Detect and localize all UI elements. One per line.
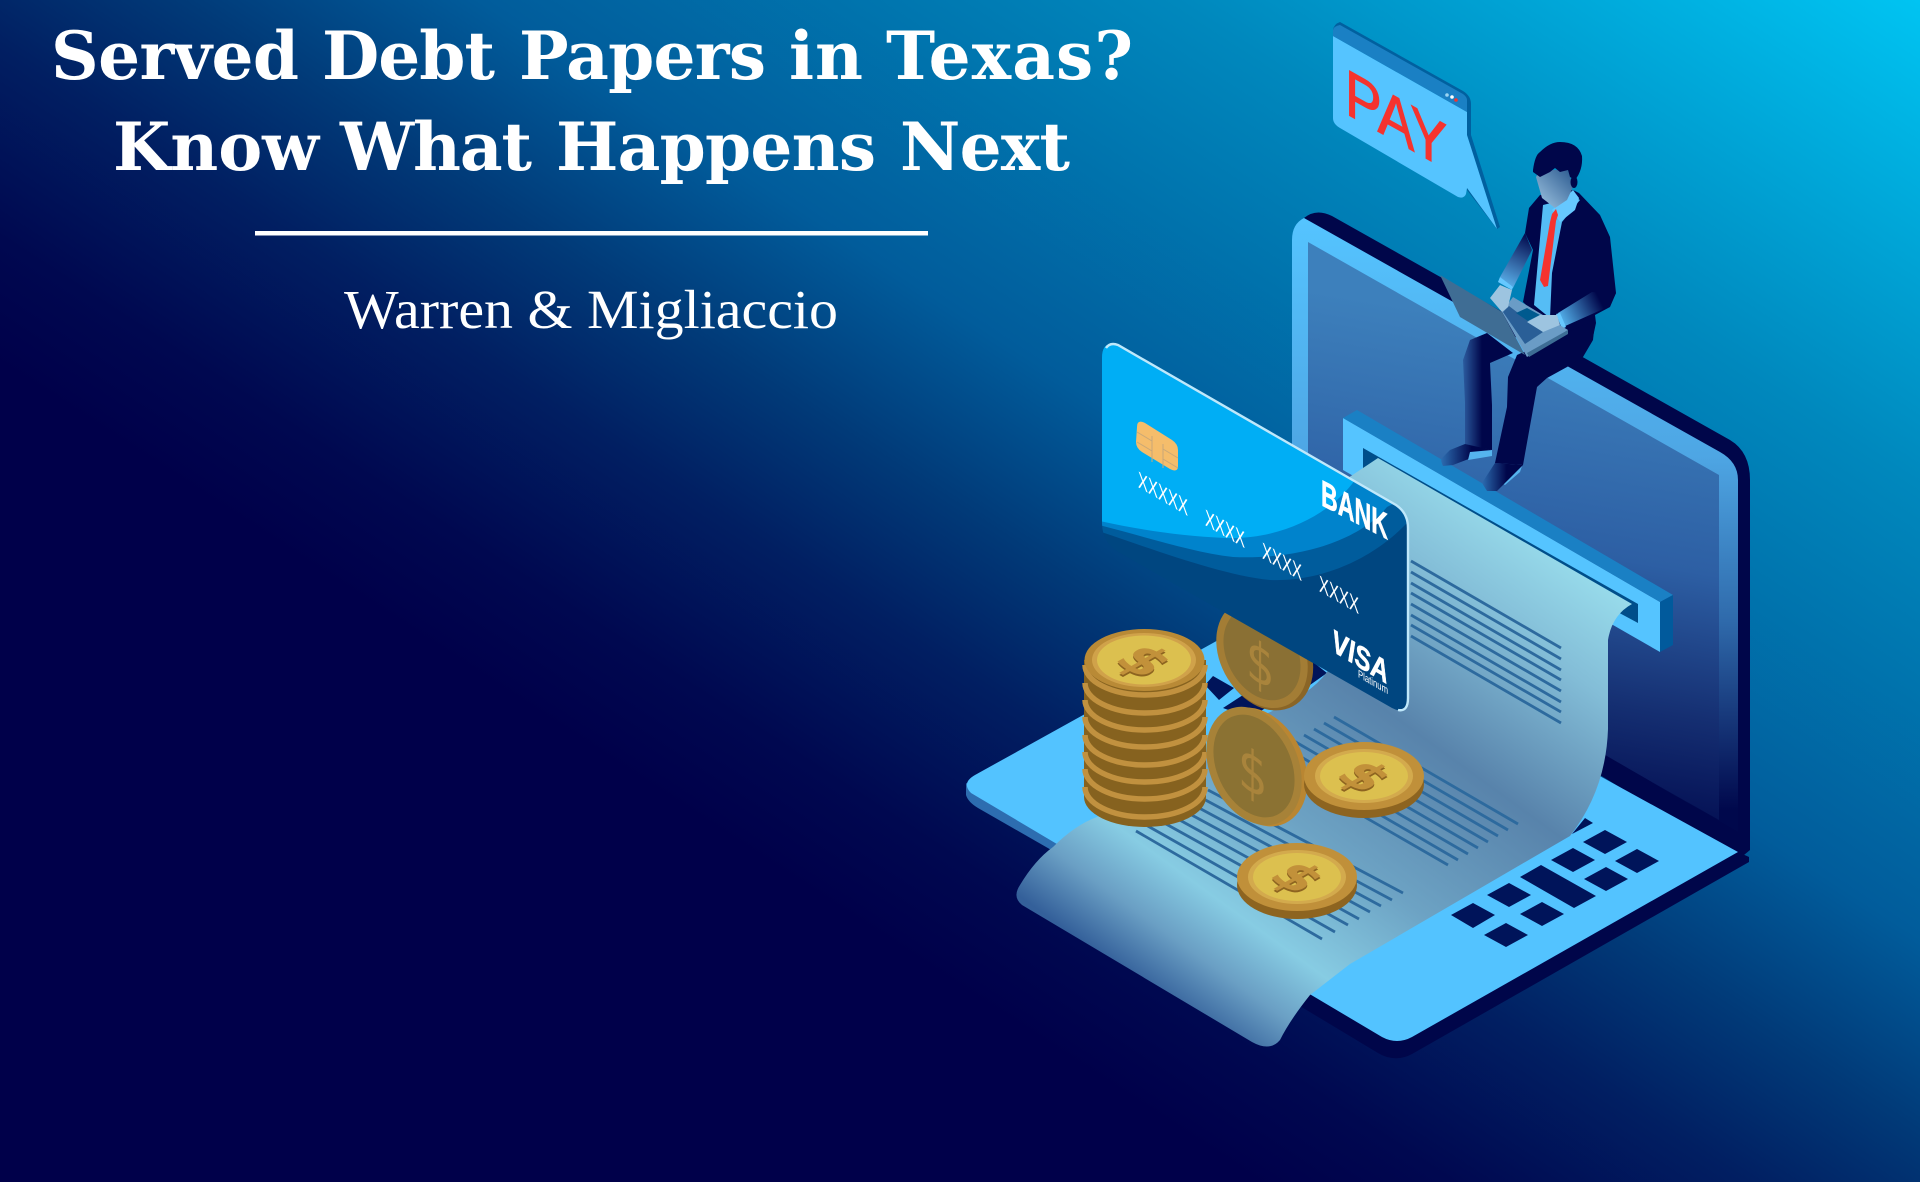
flat coin lower: $ [1255, 856, 1338, 904]
title: Debt [322, 17, 496, 95]
businessman on laptop [1440, 142, 1616, 491]
flat coin lower [1237, 843, 1357, 919]
coin stack: $ [1100, 638, 1188, 688]
hair [1533, 142, 1582, 180]
title: Served [51, 17, 299, 95]
hands [1490, 285, 1560, 332]
tie [1540, 209, 1558, 287]
card number and brand text: Platinum [1358, 667, 1388, 697]
keyboard keys [1205, 662, 1659, 947]
card number and brand text [1138, 468, 1388, 697]
back shoe [1441, 444, 1492, 466]
standing coin [1188, 691, 1326, 842]
shirt [1534, 197, 1580, 318]
title: Next [900, 108, 1070, 186]
laptop screen bezel [1292, 218, 1738, 852]
title: Know [113, 108, 321, 186]
laptop screen back edge [1304, 212, 1750, 860]
title [51, 17, 1133, 186]
title: What [339, 108, 532, 186]
PAY label: PAY [1345, 54, 1447, 184]
card chip [1136, 422, 1178, 470]
jacket [1523, 190, 1616, 337]
title: Texas? [886, 17, 1133, 95]
receipt text lines [1136, 561, 1561, 939]
front leg [1495, 320, 1595, 465]
flat coin right: $ [1322, 755, 1405, 803]
title divider rule [255, 231, 928, 236]
receipt paper [1016, 458, 1632, 1047]
card number and brand text: XXXXX [1138, 468, 1188, 522]
coin falling behind card [1198, 584, 1332, 727]
mini laptop keyboard [1503, 306, 1543, 344]
bubble header band [1333, 25, 1467, 112]
coin stack [1084, 629, 1206, 827]
speech bubble: PAY [1333, 22, 1500, 229]
bubble body [1333, 36, 1497, 229]
coin stack: $ [1100, 636, 1188, 686]
receipt slot [1343, 410, 1673, 652]
left arm [1500, 233, 1532, 288]
right forearm [1558, 292, 1616, 327]
card number and brand text: XXXX [1319, 572, 1359, 620]
front shoe [1482, 463, 1523, 491]
collar [1552, 190, 1579, 222]
keyboard deck top [967, 603, 1738, 1041]
title: in [789, 17, 863, 95]
mini laptop touchpad [1516, 308, 1540, 321]
back leg [1463, 333, 1513, 450]
card number and brand text: BANK [1321, 472, 1388, 548]
left cuff [1498, 277, 1513, 290]
hinge shadow [1600, 752, 1738, 852]
face [1536, 170, 1573, 208]
back shoe sole [1468, 450, 1492, 460]
title: Papers [519, 17, 766, 95]
laptop screen panel [1308, 242, 1719, 820]
flat coin lower: $ [1255, 854, 1338, 902]
right cuff [1556, 313, 1566, 329]
bubble dark edge [1333, 22, 1500, 229]
mini laptop front edge [1527, 330, 1568, 357]
subtitle: Warren & Migliaccio: Warren & Migliaccio [344, 279, 838, 340]
keyboard deck underside [1290, 852, 1749, 1058]
front shoe sole [1497, 463, 1523, 485]
card number and brand text: XXXX [1205, 506, 1245, 554]
mini laptop lid [1440, 275, 1525, 355]
title: Happens [556, 108, 876, 186]
flat coin right: $ [1322, 753, 1405, 801]
window dots [1445, 93, 1458, 102]
keyboard deck side [966, 783, 1080, 855]
card number and brand text: VISA [1332, 622, 1388, 692]
flat coin right [1304, 742, 1424, 818]
ear [1570, 176, 1578, 188]
card highlight edge [1106, 344, 1408, 710]
laptop illustration [966, 212, 1750, 1058]
mini laptop [1440, 275, 1568, 357]
standing coin: $ [1238, 733, 1268, 815]
coin falling behind card: $ [1246, 624, 1275, 705]
credit card [1095, 340, 1420, 710]
card number and brand text: XXXX [1262, 539, 1302, 587]
mini laptop base [1502, 297, 1568, 357]
